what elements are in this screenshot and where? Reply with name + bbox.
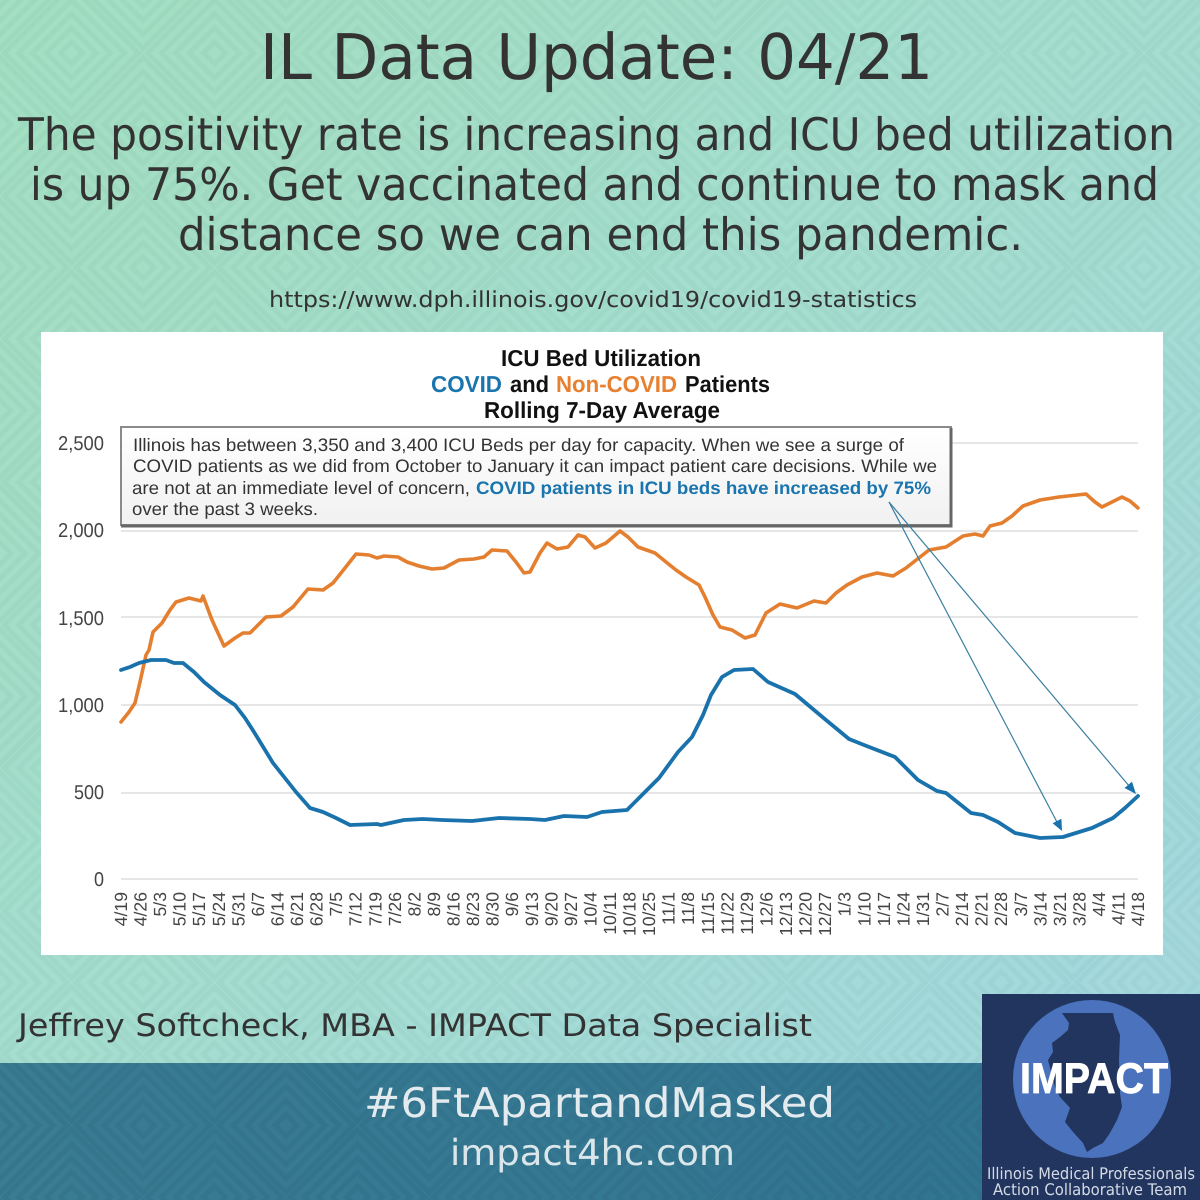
- x axis date labels: 7/5: [326, 892, 346, 916]
- y axis labels: 1,000: [58, 695, 104, 717]
- x axis date labels: 4/18: [1128, 892, 1148, 926]
- x axis date labels: 9/27: [561, 892, 581, 926]
- x axis date labels: 6/21: [287, 892, 307, 926]
- x axis date labels: 9/13: [522, 892, 542, 926]
- x axis date labels: 5/10: [170, 892, 190, 926]
- x axis date labels: 11/29: [737, 892, 757, 935]
- panel: ICU chart: [41, 332, 1163, 955]
- chart title: Rolling 7-Day Average: [484, 397, 720, 423]
- grid lines: [121, 443, 1138, 879]
- x axis date labels: 6/7: [248, 892, 268, 916]
- x axis date labels: 4/26: [131, 892, 151, 926]
- x axis date labels: 1/3: [835, 892, 855, 916]
- callout text: Illinois has between 3,350 and 3,400 ICU Beds per day for capacity. When we see a surge of: [133, 435, 905, 455]
- x axis date labels: 8/9: [424, 892, 444, 916]
- x axis date labels: 3/28: [1069, 892, 1089, 926]
- x axis date labels: 8/2: [404, 892, 424, 916]
- author credit: Jeffrey Softcheck, MBA - IMPACT Data Specialist: [16, 1008, 812, 1044]
- logo circle: [1013, 1000, 1171, 1158]
- x axis date labels: 12/20: [796, 892, 816, 936]
- x axis date labels: 10/18: [620, 892, 640, 936]
- chart title: COVID: [431, 371, 502, 397]
- x axis date labels: 6/14: [268, 892, 288, 926]
- x axis date labels: 2/28: [991, 892, 1011, 926]
- callout box: [121, 427, 951, 526]
- x axis date labels: 8/23: [463, 892, 483, 926]
- chart title: and: [510, 371, 549, 397]
- callout text: COVID patients as we did from October to January it can impact patient care decisions. While we: [133, 456, 937, 476]
- x axis date labels: 9/20: [541, 892, 561, 926]
- x axis date labels: 3/21: [1050, 892, 1070, 926]
- x axis date labels: 7/12: [346, 892, 366, 926]
- title: IL Data Update: 04/21: [260, 21, 933, 94]
- x axis date labels: 11/8: [678, 892, 698, 925]
- IMPACT logo: [982, 994, 1200, 1200]
- chart title: Non-COVID: [556, 371, 677, 397]
- x axis date labels: 10/4: [580, 892, 600, 926]
- logo caption: [987, 1164, 1195, 1199]
- x axis date labels: 9/6: [502, 892, 522, 916]
- x axis date labels: 6/28: [307, 892, 327, 926]
- website: impact4hc.com: [450, 1133, 735, 1174]
- source url: https://www.dph.illinois.gov/covid19/covid19-statistics: [269, 288, 917, 313]
- x axis date labels: 10/11: [600, 892, 620, 935]
- hashtag: #6FtApartandMasked: [364, 1079, 835, 1127]
- x axis date labels: 12/13: [776, 892, 796, 936]
- chart title: ICU Bed Utilization: [501, 345, 701, 371]
- x axis date labels: 11/15: [698, 892, 718, 935]
- x axis date labels: 4/11: [1109, 892, 1129, 925]
- callout text: are not at an immediate level of concern,: [132, 478, 470, 498]
- x axis date labels: 1/31: [913, 892, 933, 926]
- arrows from callout to curve: [889, 502, 1136, 831]
- blue line: COVID patients: [121, 660, 1138, 838]
- orange line: non-COVID patients: [121, 494, 1138, 722]
- x axis date labels: 11/22: [717, 892, 737, 935]
- x axis date labels: 12/27: [815, 892, 835, 936]
- x axis date labels: 5/24: [209, 892, 229, 926]
- icon: Illinois state silhouette: [1048, 1013, 1122, 1152]
- x axis date labels: 7/26: [385, 892, 405, 926]
- y axis labels: 2,500: [58, 433, 104, 455]
- x axis date labels: 2/7: [932, 892, 952, 916]
- x axis date labels: 7/19: [365, 892, 385, 926]
- x axis date labels: 12/6: [756, 892, 776, 926]
- x axis date labels: 2/21: [972, 892, 992, 926]
- callout text: over the past 3 weeks.: [132, 499, 318, 519]
- subtitle text block: [17, 108, 1175, 261]
- x axis date labels: 3/14: [1030, 892, 1050, 926]
- x axis date labels: 1/24: [893, 892, 913, 926]
- x axis date labels: 1/17: [874, 892, 894, 926]
- x axis date labels: 4/19: [111, 892, 131, 926]
- x axis date labels: 5/3: [150, 892, 170, 916]
- logo caption: Action Collaborative Team: [993, 1180, 1187, 1199]
- y axis labels: 2,000: [58, 520, 104, 542]
- x axis date labels: [111, 892, 1148, 936]
- logo wordmark: IMPACT: [1020, 1055, 1168, 1103]
- y axis labels: 500: [74, 782, 104, 804]
- y axis labels: 1,500: [58, 608, 104, 630]
- subtitle text block: distance so we can end this pandemic.: [178, 208, 1023, 261]
- y axis labels: 0: [94, 869, 104, 891]
- x axis date labels: 3/7: [1011, 892, 1031, 916]
- callout text: COVID patients in ICU beds have increased by 75%: [476, 478, 931, 498]
- y axis labels: [58, 433, 104, 891]
- x axis date labels: 10/25: [639, 892, 659, 936]
- chart title: Patients: [685, 371, 770, 397]
- subtitle text block: is up 75%. Get vaccinated and continue to mask and: [30, 158, 1159, 211]
- bottom band: [0, 1063, 1200, 1200]
- x axis date labels: 8/16: [444, 892, 464, 926]
- x axis date labels: 11/1: [659, 892, 679, 925]
- x axis date labels: 5/17: [189, 892, 209, 926]
- x axis date labels: 8/30: [483, 892, 503, 926]
- x axis date labels: 1/10: [854, 892, 874, 926]
- x axis date labels: 5/31: [228, 892, 248, 926]
- chart title: [431, 345, 770, 423]
- x axis date labels: 2/14: [952, 892, 972, 926]
- callout text: [132, 435, 937, 519]
- x axis date labels: 4/4: [1089, 892, 1109, 916]
